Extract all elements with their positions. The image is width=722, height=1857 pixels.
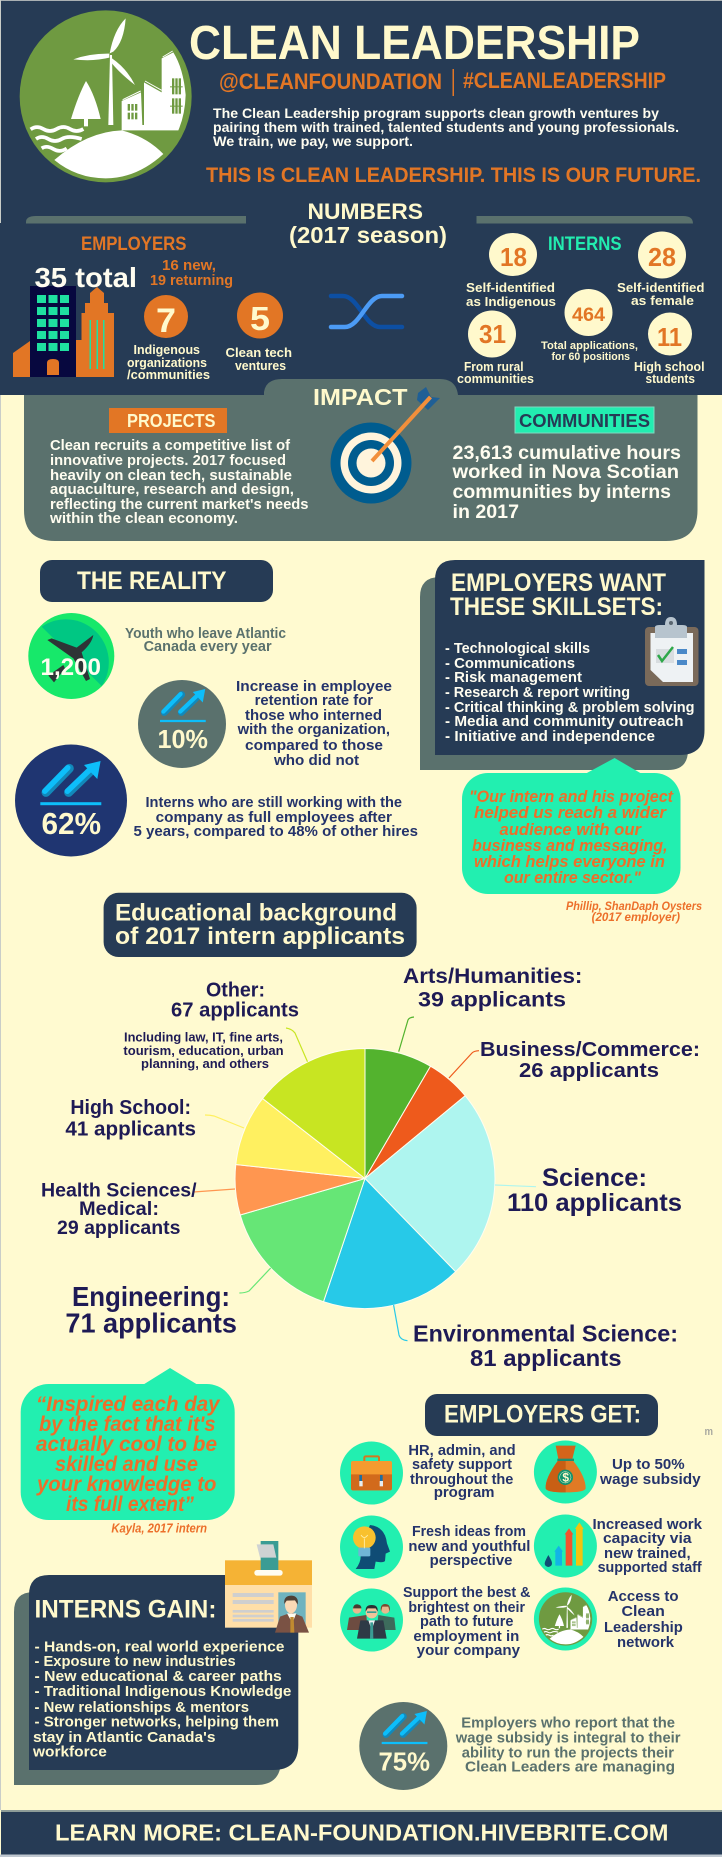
heading: the reality	[40, 560, 273, 602]
icon: city buildings	[13, 286, 114, 377]
interns numbers: for 60 positions	[552, 351, 630, 363]
benefit: HR support	[340, 1442, 516, 1504]
pie labels: 71 applicants	[65, 1308, 237, 1339]
pie labels: 81 applicants	[470, 1345, 622, 1371]
skills list: - Risk management	[445, 669, 582, 686]
projects column: Clean recruits a competitive list of	[50, 438, 290, 454]
panel: interns gain: INTERNS GAIN:	[34, 1596, 216, 1624]
heading: the reality: THE REALITY	[77, 567, 227, 595]
gains list: - Traditional Indigenous Knowledge	[34, 1683, 291, 1700]
pie labels	[41, 965, 700, 1371]
interns numbers: communities	[457, 372, 534, 386]
interns numbers: High school	[634, 360, 704, 374]
benefit: HR support: safety support	[412, 1456, 512, 1473]
gains list: - New educational & career paths	[34, 1668, 282, 1685]
heading: numbers: (2017 season)	[289, 222, 447, 248]
projects column: PROJECTS	[127, 411, 216, 431]
callout: intern quote: your knowledge to	[36, 1473, 217, 1496]
gains list: stay in Atlantic Canada's	[33, 1729, 216, 1746]
interns numbers: as Indigenous	[466, 295, 556, 309]
communities column	[451, 407, 681, 523]
employers numbers: EMPLOYERS	[81, 234, 186, 255]
callout: intern quote: “Inspired each day	[36, 1393, 221, 1416]
pie labels: Business/Commerce:	[480, 1039, 700, 1061]
skills list: - Initiative and independence	[445, 728, 655, 745]
benefit: HR support: program	[434, 1484, 494, 1501]
interns numbers: 464	[572, 305, 605, 326]
gains list: - New relationships & mentors	[34, 1699, 249, 1716]
benefit: support the best: employment in	[413, 1628, 519, 1645]
interns numbers: students	[646, 372, 695, 386]
interns numbers: From rural	[464, 360, 524, 374]
social handles: @CLEANFOUNDATION	[219, 69, 442, 94]
employers numbers: ventures	[235, 359, 286, 373]
text: retention increase: retention rate for	[255, 692, 373, 709]
panel: employers want these skillsets: EMPLOYERS WANT	[451, 569, 666, 597]
interns numbers: Self-identified	[466, 281, 555, 295]
stat: 62 percent still working: 62%	[42, 806, 101, 841]
callout: intern quote: skilled and use	[55, 1453, 198, 1476]
projects column: innovative projects. 2017 focused	[50, 453, 286, 469]
benefit: HR support: HR, admin, and	[408, 1442, 516, 1459]
pie labels: tourism, education, urban	[123, 1043, 284, 1058]
social handles: #CLEANLEADERSHIP	[463, 68, 666, 93]
icon: briefcase	[351, 1456, 392, 1490]
benefit: wage subsidy: wage subsidy	[599, 1471, 701, 1488]
gains list: workforce	[32, 1744, 107, 1761]
pie labels: planning, and others	[141, 1056, 269, 1071]
text: retention increase: compared to those	[245, 737, 383, 754]
pie labels: Medical:	[79, 1199, 159, 1220]
benefit: increased capacity: capacity via	[603, 1530, 692, 1547]
communities column: COMMUNITIES	[519, 411, 650, 431]
callout: employer quote: which helps everyone in	[474, 852, 665, 871]
skills list: - Research & report writing	[445, 684, 630, 701]
interns numbers: Total applications,	[541, 340, 638, 352]
stat: 75 percent wage subsidy: 75%	[378, 1747, 430, 1777]
stat: 10 percent retention	[138, 680, 226, 768]
communities column: in 2017	[452, 501, 519, 523]
employers numbers: 19 returning	[150, 272, 233, 289]
benefit: fresh ideas: perspective	[430, 1552, 512, 1569]
benefit: wage subsidy: Up to 50%	[612, 1456, 685, 1473]
interns numbers: 18	[500, 242, 527, 272]
pie labels: Arts/Humanities:	[403, 965, 582, 988]
stat: 62 percent still working	[15, 744, 127, 856]
icon: Clean Foundation logo	[20, 10, 192, 182]
panel: employer benefits	[340, 1440, 703, 1659]
interns numbers: 31	[479, 319, 506, 349]
employers numbers	[13, 234, 292, 382]
benefit: network access: Clean	[622, 1603, 665, 1620]
icon: growth arrows large	[40, 761, 101, 805]
pie labels: 39 applicants	[418, 989, 566, 1012]
icon: head with lightbulb	[353, 1525, 390, 1569]
callout: intern quote	[21, 1368, 235, 1520]
interns numbers: 28	[648, 242, 676, 272]
skills list: - Critical thinking & problem solving	[445, 699, 694, 716]
text: wage subsidy integral: wage subsidy is integral to their	[455, 1730, 681, 1747]
text: youth who leave	[125, 626, 286, 655]
heading: numbers	[26, 199, 693, 248]
panel: header and numbers background	[0, 0, 722, 395]
pie labels: Health Sciences/	[41, 1181, 197, 1202]
quote attribution: employer	[566, 899, 702, 924]
skills list: - Media and community outreach	[445, 713, 684, 730]
pie labels: Including law, IT, fine arts,	[124, 1030, 283, 1045]
interns numbers: Self-identified	[617, 281, 704, 295]
employers numbers: Indigenous	[134, 343, 200, 357]
text: interns still working	[134, 794, 418, 840]
stat: 1,200 youth: 1,200	[40, 654, 101, 681]
pie labels: 67 applicants	[171, 1000, 299, 1022]
panel: interns gain	[14, 1541, 312, 1785]
pie chart: applicants by education	[235, 1048, 495, 1308]
projects column: heavily on clean tech, sustainable	[50, 468, 292, 484]
text: wage subsidy integral: ability to run the projects their	[462, 1745, 674, 1762]
callout: intern quote: by the fact that it's	[39, 1413, 216, 1436]
footer	[0, 1810, 722, 1857]
pie leader lines	[193, 1017, 536, 1341]
icon: growth arrows	[382, 1711, 427, 1744]
callout: intern quote: actually cool to be	[36, 1433, 217, 1456]
text: youth who leave: Youth who leave Atlantic	[125, 626, 286, 642]
interns numbers: INTERNS	[548, 234, 622, 255]
panel: impact	[24, 379, 698, 541]
quote attribution: employer: (2017 employer)	[592, 910, 680, 924]
icon: growth arrows small	[160, 689, 206, 722]
footer: LEARN MORE: CLEAN-FOUNDATION.HIVEBRITE.COM	[55, 1820, 668, 1846]
stray mark: m	[704, 1426, 713, 1438]
benefit: support the best: Support the best &	[403, 1584, 531, 1601]
gains list: - Exposure to new industries	[34, 1653, 236, 1670]
pie labels: 110 applicants	[507, 1189, 682, 1217]
icon: target with arrow	[330, 387, 440, 504]
employers numbers: Clean tech	[226, 346, 292, 360]
intro paragraph	[213, 105, 679, 149]
callout: employer quote: audience with our	[500, 820, 642, 839]
text: wage subsidy integral: Clean Leaders are managing	[465, 1759, 675, 1776]
text: interns still working: Interns who are still working with the	[146, 794, 402, 811]
stat: 10 percent retention: 10%	[158, 724, 208, 754]
pie labels: 41 applicants	[65, 1119, 196, 1141]
text: youth who leave: Canada every year	[144, 639, 272, 655]
heading: numbers: NUMBERS	[308, 199, 423, 224]
heading: impact: IMPACT	[313, 384, 408, 410]
benefit: increased capacity: supported staff	[598, 1559, 703, 1576]
benefit: fresh ideas: Fresh ideas from	[412, 1523, 526, 1540]
quote attribution: employer: Phillip, ShanDaph Oysters	[566, 899, 702, 913]
employers numbers: 35 total	[34, 262, 137, 293]
employers numbers: 5	[250, 300, 270, 337]
text: wage subsidy integral	[455, 1715, 681, 1776]
benefit: support the best: brightest on their	[408, 1599, 525, 1616]
callout: employer quote: our entire sector."	[504, 868, 642, 887]
pie labels: Engineering:	[72, 1281, 230, 1312]
benefit: network access	[534, 1588, 683, 1651]
pie labels: Other:	[206, 980, 265, 1002]
stat: 1,200 youth	[28, 613, 114, 699]
panel: employers want these skillsets	[420, 560, 704, 770]
employers numbers: /communities	[127, 368, 210, 382]
text: interns still working: 5 years, compared to 48% of other hires	[134, 823, 418, 840]
communities column: communities by interns	[452, 481, 671, 503]
benefit: support the best: your company	[417, 1642, 521, 1659]
heading: educational background: Educational background	[115, 900, 397, 927]
icon: rising bars	[545, 1522, 584, 1567]
projects column	[49, 408, 309, 527]
heading: educational background	[104, 893, 417, 957]
skills list	[445, 640, 694, 745]
employers numbers: organizations	[127, 356, 207, 370]
projects column: aquaculture, research and design,	[50, 482, 294, 498]
text: retention increase	[236, 678, 392, 769]
text: retention increase: those who interned	[245, 707, 382, 724]
benefit: increased capacity: new trained,	[604, 1545, 691, 1562]
benefit: wage subsidy	[534, 1440, 701, 1504]
heading: educational background: of 2017 intern applicants	[115, 923, 405, 950]
employers numbers: 16 new,	[162, 257, 216, 274]
text: retention increase: with the organization,	[237, 721, 390, 738]
heading: employers get	[425, 1394, 658, 1436]
tagline: THIS IS CLEAN LEADERSHIP. THIS IS OUR FUTURE.	[206, 164, 701, 187]
intro paragraph: The Clean Leadership program supports clean growth ventures by	[213, 105, 659, 121]
social handles	[219, 68, 666, 96]
benefit: HR support: throughout the	[410, 1471, 513, 1488]
icon: shuffle arrows	[331, 296, 402, 327]
icon: clipboard	[645, 617, 698, 686]
callout: employer quote: helped us reach a wider	[474, 803, 667, 822]
benefit: fresh ideas	[340, 1516, 530, 1578]
text: retention increase: Increase in employee	[236, 678, 392, 695]
communities column: worked in Nova Scotian	[451, 461, 679, 483]
icon: business team	[347, 1604, 396, 1639]
benefit: increased capacity: Increased work	[592, 1516, 703, 1533]
interns numbers	[457, 232, 704, 386]
icon: money bag	[546, 1446, 586, 1492]
projects column: within the clean economy.	[49, 511, 238, 527]
icon: ID badge	[225, 1541, 312, 1633]
employers numbers: 7	[156, 302, 176, 340]
benefit: fresh ideas: new and youthful	[408, 1538, 530, 1555]
gains list: - Hands-on, real world experience	[34, 1639, 284, 1656]
projects column: reflecting the current market's needs	[50, 497, 308, 513]
pie labels: 29 applicants	[57, 1218, 180, 1239]
text: retention increase: who did not	[273, 752, 359, 769]
heading: employers get: EMPLOYERS GET:	[444, 1401, 641, 1429]
icon: money bag: $	[562, 1471, 569, 1485]
pie labels: 26 applicants	[519, 1060, 659, 1082]
text: interns still working: company as full employees after	[156, 809, 392, 826]
gains list: - Stronger networks, helping them	[34, 1714, 279, 1731]
callout: employer quote	[462, 758, 680, 894]
communities column: 23,613 cumulative hours	[452, 442, 681, 464]
callout: employer quote: "Our intern and his project	[469, 787, 674, 806]
callout: intern quote: its full extent”	[66, 1493, 194, 1516]
callout: employer quote: business and messaging,	[472, 836, 668, 855]
benefit: network access: Access to	[608, 1588, 679, 1605]
benefit: support the best: path to future	[420, 1613, 513, 1630]
skills list: - Technological skills	[445, 640, 590, 657]
panel: employers want these skillsets: THESE SKILLSETS:	[450, 593, 663, 621]
pie labels: Environmental Science:	[413, 1321, 678, 1347]
title: CLEAN LEADERSHIP	[189, 17, 640, 70]
interns numbers: 11	[657, 322, 682, 352]
benefit: support the best	[340, 1584, 531, 1659]
text: wage subsidy integral: Employers who report that the	[461, 1715, 675, 1732]
benefit: network access: Leadership	[604, 1619, 683, 1636]
pie labels: High School:	[70, 1097, 191, 1119]
icon: airplane	[47, 635, 93, 682]
intro paragraph: We train, we pay, we support.	[213, 133, 413, 149]
stat: 75 percent wage subsidy	[359, 1702, 447, 1790]
skills list: - Communications	[445, 655, 575, 672]
interns numbers: as female	[631, 294, 694, 308]
benefit: increased capacity	[534, 1514, 703, 1578]
benefit: network access: network	[617, 1634, 675, 1651]
pie labels: Science:	[542, 1164, 647, 1192]
gains list	[32, 1639, 291, 1761]
quote attribution: intern: Kayla, 2017 intern	[111, 1521, 207, 1536]
intro paragraph: pairing them with trained, talented students and young professionals.	[213, 119, 679, 135]
icon: mini logo	[539, 1592, 592, 1646]
